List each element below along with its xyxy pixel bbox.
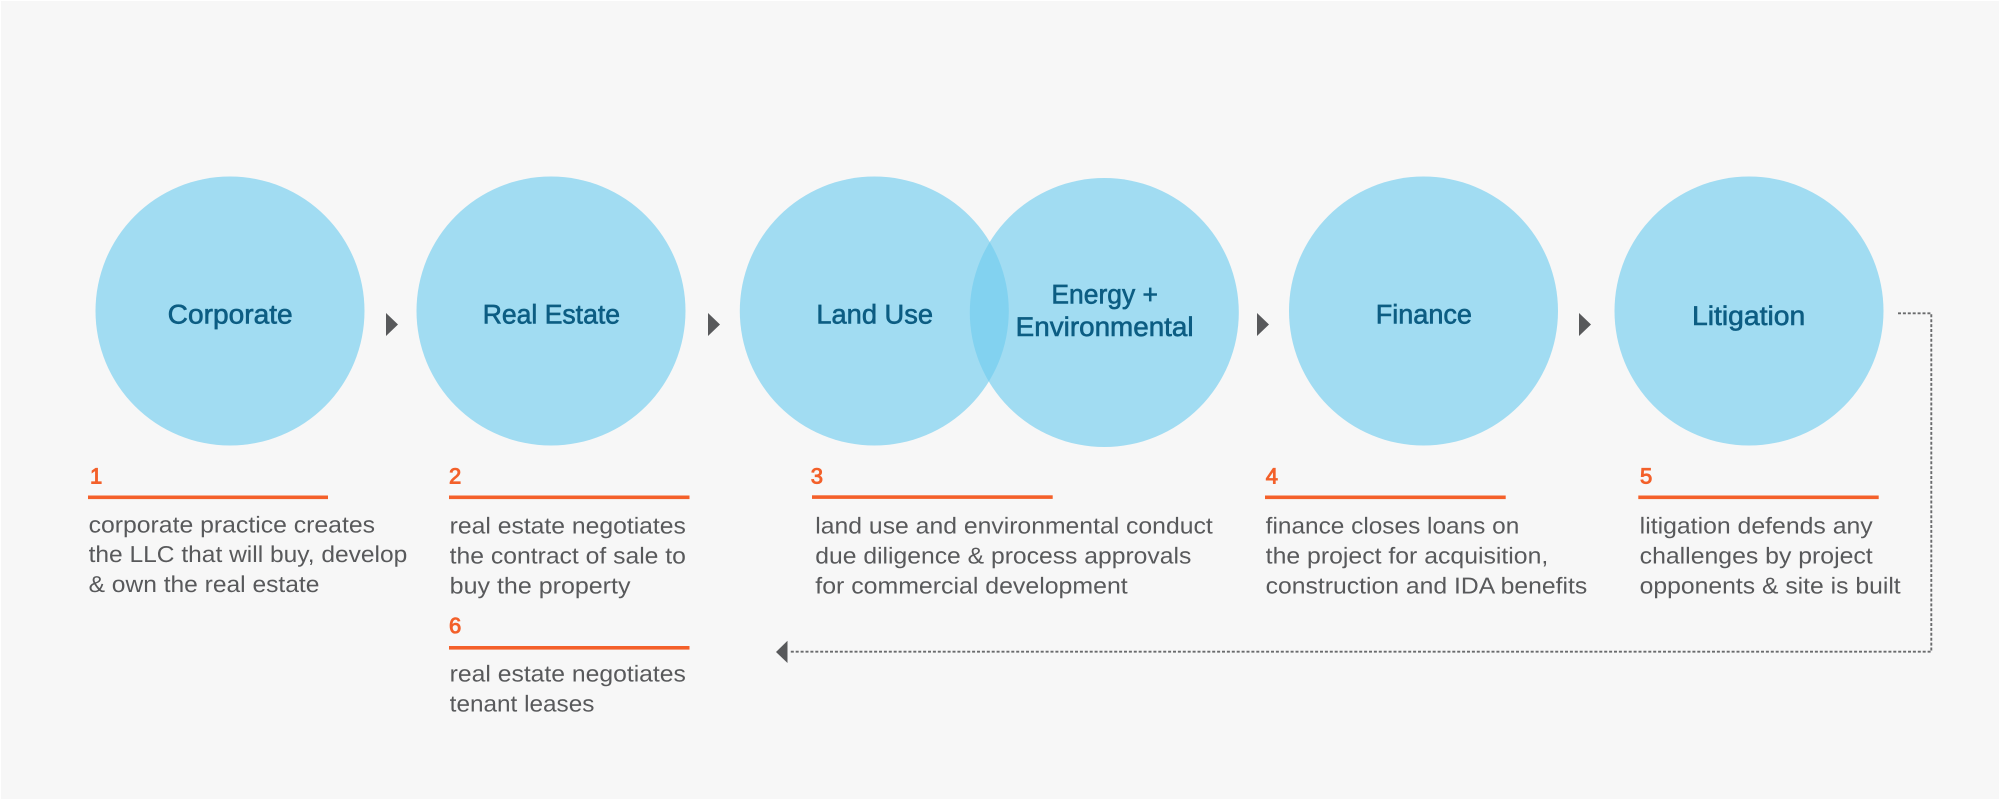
circle: Corporate: Corporate [168,299,293,329]
step 6 text block: 6 [449,613,461,638]
step 4 text block: 4 [1266,464,1278,488]
step 1 text block [88,464,407,597]
step 6 text block: tenant leases [450,691,594,717]
step 4 text block [1265,464,1587,598]
step 5 text block: opponents & site is built [1640,572,1901,598]
circle: Finance [1289,176,1558,446]
step 3 text block: land use and environmental conduct [815,512,1213,538]
circle: Corporate [96,176,364,446]
circle: Finance: Finance [1376,299,1472,329]
circle: Real Estate: Real Estate [483,299,620,329]
step 2 text block: buy the property [450,572,631,598]
overlapping circles: Land Use and Energy + Environmental: Energy + [1051,279,1158,309]
circle: Litigation [1614,176,1884,446]
step 4 text block: the project for acquisition, [1266,542,1548,568]
step 2 text block: real estate negotiates [450,512,686,538]
overlapping circles: Land Use and Energy + Environmental [740,176,1239,447]
step 2 text block [449,464,690,598]
step 5 text block: 5 [1640,464,1652,488]
step 2 text block: 2 [449,464,461,488]
step 1 text block: 1 [90,464,102,488]
step 6 text block: real estate negotiates [450,661,686,687]
overlapping circles: Land Use and Energy + Environmental: Land Use [816,299,933,329]
circle: Litigation: Litigation [1692,301,1805,331]
step 5 text block: challenges by project [1640,542,1873,568]
arrow: Energy + Environmental to Finance [1257,313,1269,336]
step 4 text block: finance closes loans on [1266,512,1519,538]
overlapping circles: Land Use and Energy + Environmental: Environmental [1016,312,1194,342]
step 3 text block: due diligence & process approvals [815,542,1191,568]
step 5 text block: litigation defends any [1640,512,1873,538]
arrow: Finance to Litigation [1579,313,1591,336]
step 2 text block: the contract of sale to [450,542,686,568]
arrow: Real Estate to Land Use [708,313,720,336]
step 3 text block: 3 [811,464,823,488]
step 3 text block: for commercial development [815,572,1128,598]
dotted return arrow: Litigation back to step 6 [776,313,1931,663]
step 1 text block: the LLC that will buy, develop [89,541,407,567]
arrow: Corporate to Real Estate [386,313,398,336]
circle: Real Estate [416,176,686,446]
step 5 text block [1638,464,1901,598]
step 1 text block: & own the real estate [89,571,319,597]
step 1 text block: corporate practice creates [89,512,375,538]
step 4 text block: construction and IDA benefits [1266,572,1587,598]
step 3 text block [811,464,1213,598]
step 6 text block [449,613,690,717]
